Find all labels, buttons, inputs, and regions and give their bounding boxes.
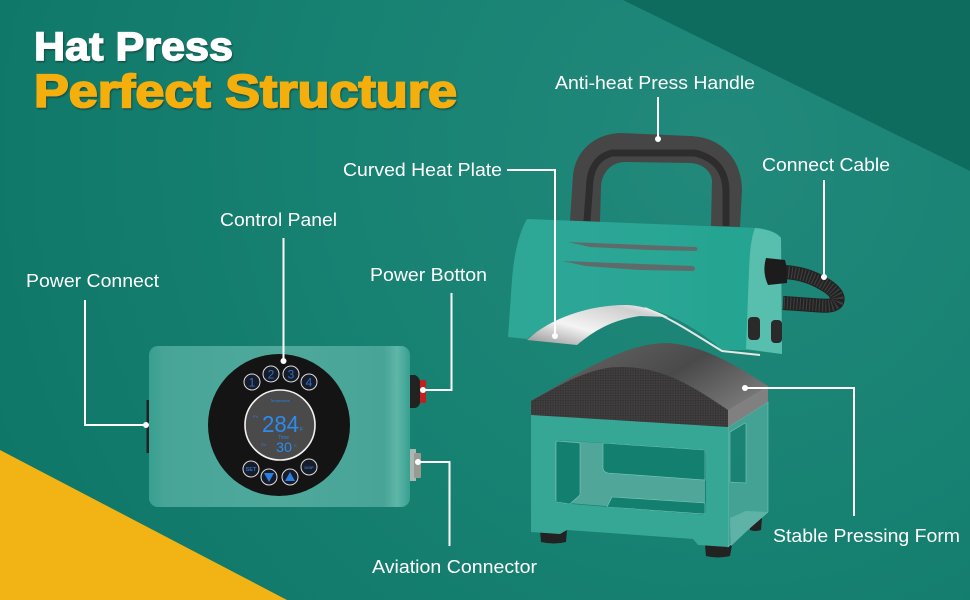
stable pressing form xyxy=(531,343,768,558)
top buttons: 2 xyxy=(268,368,275,382)
display: S xyxy=(294,443,297,448)
label: power connect xyxy=(26,270,159,428)
feet xyxy=(540,518,762,558)
aviation connector xyxy=(410,449,421,481)
side band xyxy=(728,386,768,427)
label: stable pressing form: Stable Pressing Form xyxy=(773,525,960,546)
top buttons: 3 xyxy=(288,368,295,382)
dark corner panel xyxy=(623,0,970,171)
power button xyxy=(410,375,426,408)
heat press handle xyxy=(570,133,742,227)
label: connect cable xyxy=(762,154,890,280)
silver rim xyxy=(645,308,760,355)
label: curved heat plate xyxy=(343,159,558,339)
label: control panel: Control Panel xyxy=(220,209,337,230)
top buttons: 4 xyxy=(306,376,313,390)
label: aviation connector: Aviation Connector xyxy=(372,556,537,577)
dome top surface xyxy=(531,343,768,427)
label: connect cable: Connect Cable xyxy=(762,154,890,175)
label: aviation connector xyxy=(372,459,537,577)
display: PV xyxy=(253,414,259,419)
silver plate xyxy=(527,305,668,345)
control panel disc xyxy=(208,354,350,496)
yellow corner triangle xyxy=(0,450,287,600)
bottom buttons: SET xyxy=(246,467,257,473)
label: curved heat plate: Curved Heat Plate xyxy=(343,159,502,180)
display: 284 xyxy=(262,411,299,437)
control box device xyxy=(146,346,426,507)
box body xyxy=(149,346,410,507)
top buttons: 1 xyxy=(249,376,256,390)
connect cable xyxy=(783,272,838,306)
vent slots xyxy=(563,242,698,271)
label: anti-heat press handle: Anti-heat Press Handle xyxy=(555,72,755,93)
knobs xyxy=(748,317,782,343)
display: F xyxy=(300,427,303,433)
top buttons xyxy=(244,366,317,390)
title: Perfect Structure xyxy=(34,65,457,117)
label: control panel xyxy=(220,209,337,364)
title: Hat Press xyxy=(34,25,233,69)
label: power botton: Power Botton xyxy=(370,264,487,285)
bottom buttons xyxy=(243,459,317,485)
label: power connect: Power Connect xyxy=(26,270,159,291)
title xyxy=(34,25,457,117)
stand front xyxy=(531,414,728,547)
display xyxy=(245,390,315,460)
curved heat plate housing xyxy=(508,219,787,355)
textured front xyxy=(531,367,728,427)
stand side xyxy=(728,402,768,547)
rear openings xyxy=(556,441,705,514)
label: anti-heat press handle xyxy=(555,72,755,142)
power connect socket xyxy=(146,400,150,453)
label: stable pressing form xyxy=(742,385,960,546)
side floor xyxy=(730,511,767,546)
handle groove xyxy=(587,153,726,226)
display: SV xyxy=(261,442,267,447)
display: 30 xyxy=(276,439,292,455)
connector nut xyxy=(764,258,787,285)
display: Time xyxy=(278,435,289,441)
stand back interior xyxy=(555,440,705,514)
label: power botton xyxy=(370,264,487,393)
housing end face xyxy=(746,228,782,354)
bottom buttons: DISP xyxy=(304,465,314,470)
display: Temperature xyxy=(270,399,290,403)
housing xyxy=(508,219,782,354)
